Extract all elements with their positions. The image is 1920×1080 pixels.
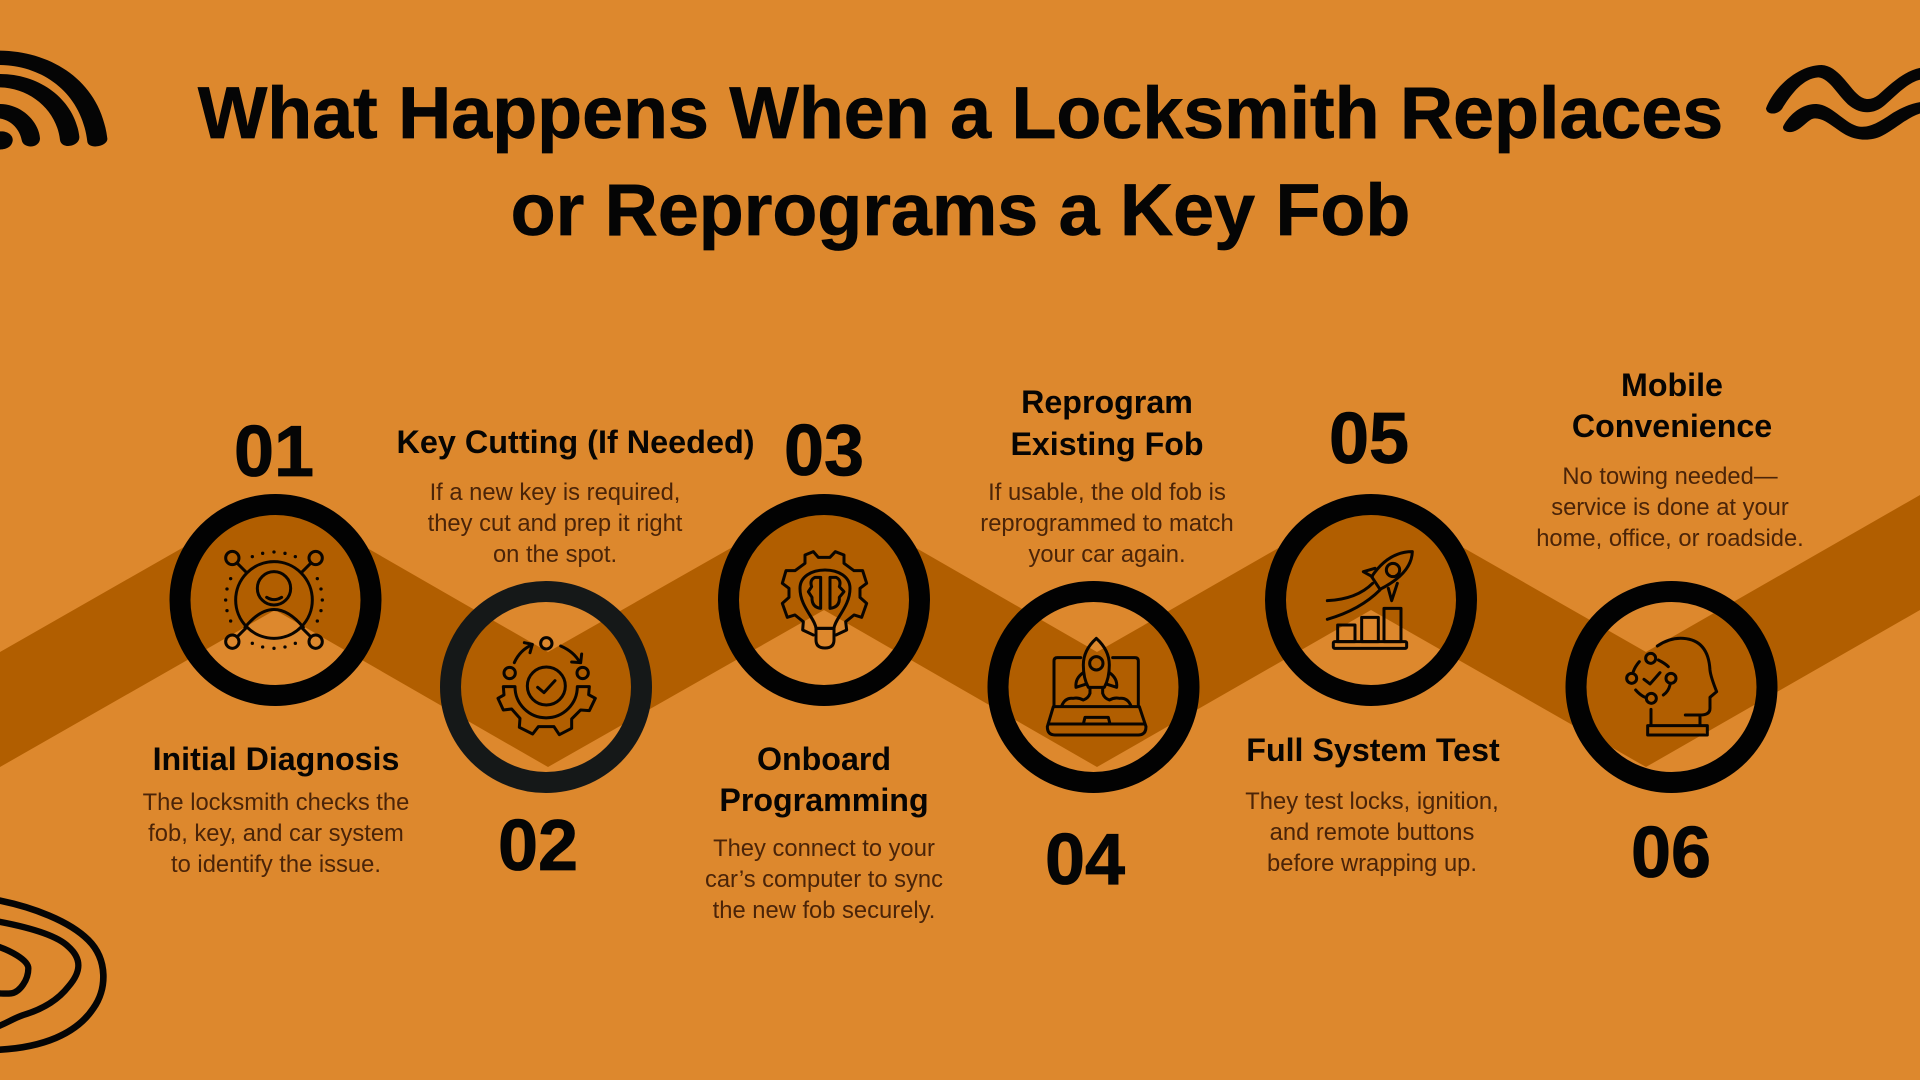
step 03: onboard programming: [705, 411, 943, 924]
step 05: full system test: [1245, 399, 1500, 877]
description: key cutting: they cut and prep it right: [428, 510, 683, 537]
description: mobile convenience: No towing needed—: [1562, 463, 1778, 490]
number 03: 03: [784, 411, 864, 491]
heading: reprogram existing fob: Reprogram: [1021, 384, 1193, 420]
number 04: 04: [1045, 820, 1125, 900]
icon: gear with check: [498, 638, 595, 735]
ring 05: [1276, 504, 1466, 696]
description: onboard programming: They connect to your: [713, 835, 935, 862]
number 01: 01: [234, 412, 314, 492]
description: full system test: before wrapping up.: [1267, 850, 1477, 877]
decoration: contour rings bottom left: [0, 899, 103, 1050]
heading: mobile convenience: Convenience: [1572, 408, 1772, 444]
heading: mobile convenience: Mobile: [1621, 367, 1723, 403]
heading: key cutting: Key Cutting (If Needed): [396, 424, 755, 460]
description: reprogram existing fob: reprogrammed to match: [980, 510, 1234, 537]
description: reprogram existing fob: your car again.: [1028, 541, 1186, 568]
heading: initial diagnosis: Initial Diagnosis: [153, 741, 399, 777]
decoration: concentric arcs top left: [0, 51, 107, 149]
heading: reprogram existing fob: Existing Fob: [1010, 426, 1204, 462]
icon: gear bulb with brain: [782, 552, 867, 648]
icon: laptop with rocket: [1047, 638, 1146, 735]
description: initial diagnosis: to identify the issue.: [171, 851, 381, 878]
description: mobile convenience: service is done at your: [1551, 494, 1789, 521]
ring 03: [728, 504, 920, 696]
description: full system test: They test locks, ignition,: [1245, 788, 1499, 815]
description: reprogram existing fob: If usable, the old fob is: [988, 479, 1226, 506]
ring 02: [450, 592, 642, 782]
description: full system test: and remote buttons: [1270, 819, 1474, 846]
rings: [180, 504, 1767, 782]
description: key cutting: If a new key is required,: [430, 479, 680, 506]
step 06: mobile convenience: [1536, 367, 1804, 893]
step 01: initial diagnosis: [143, 412, 409, 878]
description: initial diagnosis: The locksmith checks the: [143, 789, 409, 816]
heading: full system test: Full System Test: [1246, 732, 1500, 768]
heading: onboard programming: Programming: [719, 782, 929, 818]
icon: rocket over bar chart: [1327, 552, 1412, 648]
description: key cutting: on the spot.: [493, 541, 617, 568]
number 05: 05: [1329, 399, 1409, 479]
ring 01: [180, 504, 371, 696]
ring 06: [1576, 592, 1767, 782]
number 02: 02: [498, 806, 578, 886]
description: onboard programming: car’s computer to sync: [705, 866, 943, 893]
number 06: 06: [1631, 813, 1711, 893]
description: mobile convenience: home, office, or roadside.: [1536, 525, 1804, 552]
ring 04: [998, 592, 1189, 782]
description: initial diagnosis: fob, key, and car system: [148, 820, 404, 847]
title: or Reprograms a Key Fob: [511, 168, 1410, 251]
step 02: key cutting: [396, 424, 755, 886]
decoration: waves top right: [1766, 65, 1920, 140]
heading: onboard programming: Onboard: [757, 741, 891, 777]
icon: head with check cycle: [1627, 638, 1717, 735]
description: onboard programming: the new fob securely.: [713, 897, 935, 924]
step 04: reprogram existing fob: [980, 384, 1234, 900]
zigzag band: [0, 495, 1920, 767]
title: What Happens When a Locksmith Replaces: [198, 71, 1723, 154]
icon: person network: [224, 550, 324, 650]
